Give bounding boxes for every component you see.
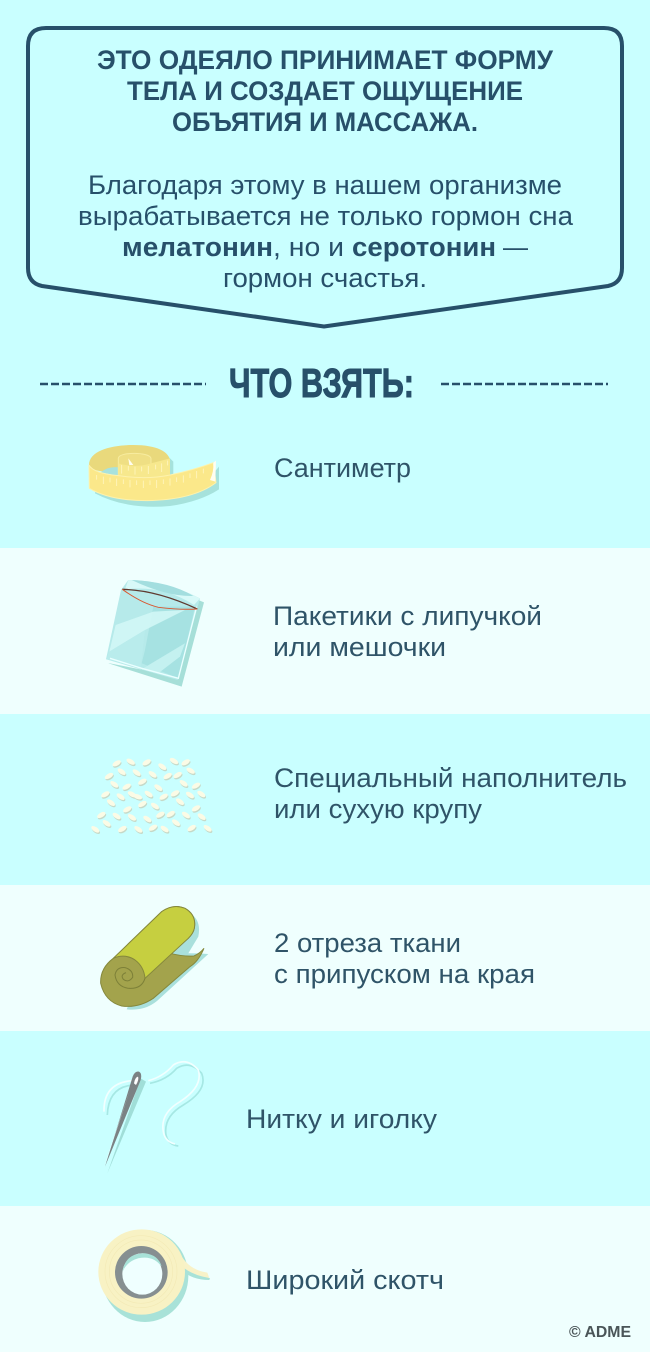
callout body text: серотонин — [352, 232, 496, 262]
callout body text: гормон счастья. — [223, 263, 427, 293]
callout body text — [78, 170, 574, 293]
callout heading: ТЕЛА И СОЗДАЕТ ОЩУЩЕНИЕ — [127, 76, 523, 106]
label: fabric: с припуском на края — [274, 959, 535, 989]
label: measuring tape: Сантиметр — [274, 453, 411, 483]
label: fabric — [274, 928, 535, 989]
label: zip bag — [273, 601, 542, 662]
callout heading: ЭТО ОДЕЯЛО ПРИНИМАЕТ ФОРМУ — [97, 45, 554, 75]
callout body text: — — [503, 232, 528, 262]
callout heading — [97, 45, 554, 137]
callout body text: Благодаря этому в нашем организме — [88, 170, 562, 200]
icon: needle and thread — [103, 1062, 203, 1173]
label: wide tape: Широкий скотч — [246, 1265, 444, 1295]
icon: fabric roll — [101, 906, 208, 1010]
label: fabric: 2 отреза ткани — [274, 928, 461, 958]
icon: zip bag — [106, 580, 204, 687]
label: needle and thread: Нитку и иголку — [246, 1104, 438, 1134]
logo: ADME credit: © ADME — [569, 1324, 631, 1341]
icon: measuring tape — [89, 445, 219, 507]
callout body text: , но и — [273, 232, 344, 262]
icon: filler grains — [90, 757, 213, 835]
icon: wide tape roll — [98, 1229, 210, 1322]
label: filler: или сухую крупу — [274, 794, 483, 824]
label: zip bag: или мешочки — [273, 632, 446, 662]
callout body text: вырабатывается не только гормон сна — [78, 201, 574, 231]
callout panel — [28, 28, 622, 326]
label: filler — [274, 763, 627, 824]
label: zip bag: Пакетики с липучкой — [273, 601, 542, 631]
callout body text: мелатонин — [122, 232, 273, 262]
label: filler: Специальный наполнитель — [274, 763, 627, 793]
section heading with dashes: ЧТО ВЗЯТЬ: — [229, 360, 414, 406]
callout heading: ОБЪЯТИЯ И МАССАЖА. — [172, 107, 478, 137]
